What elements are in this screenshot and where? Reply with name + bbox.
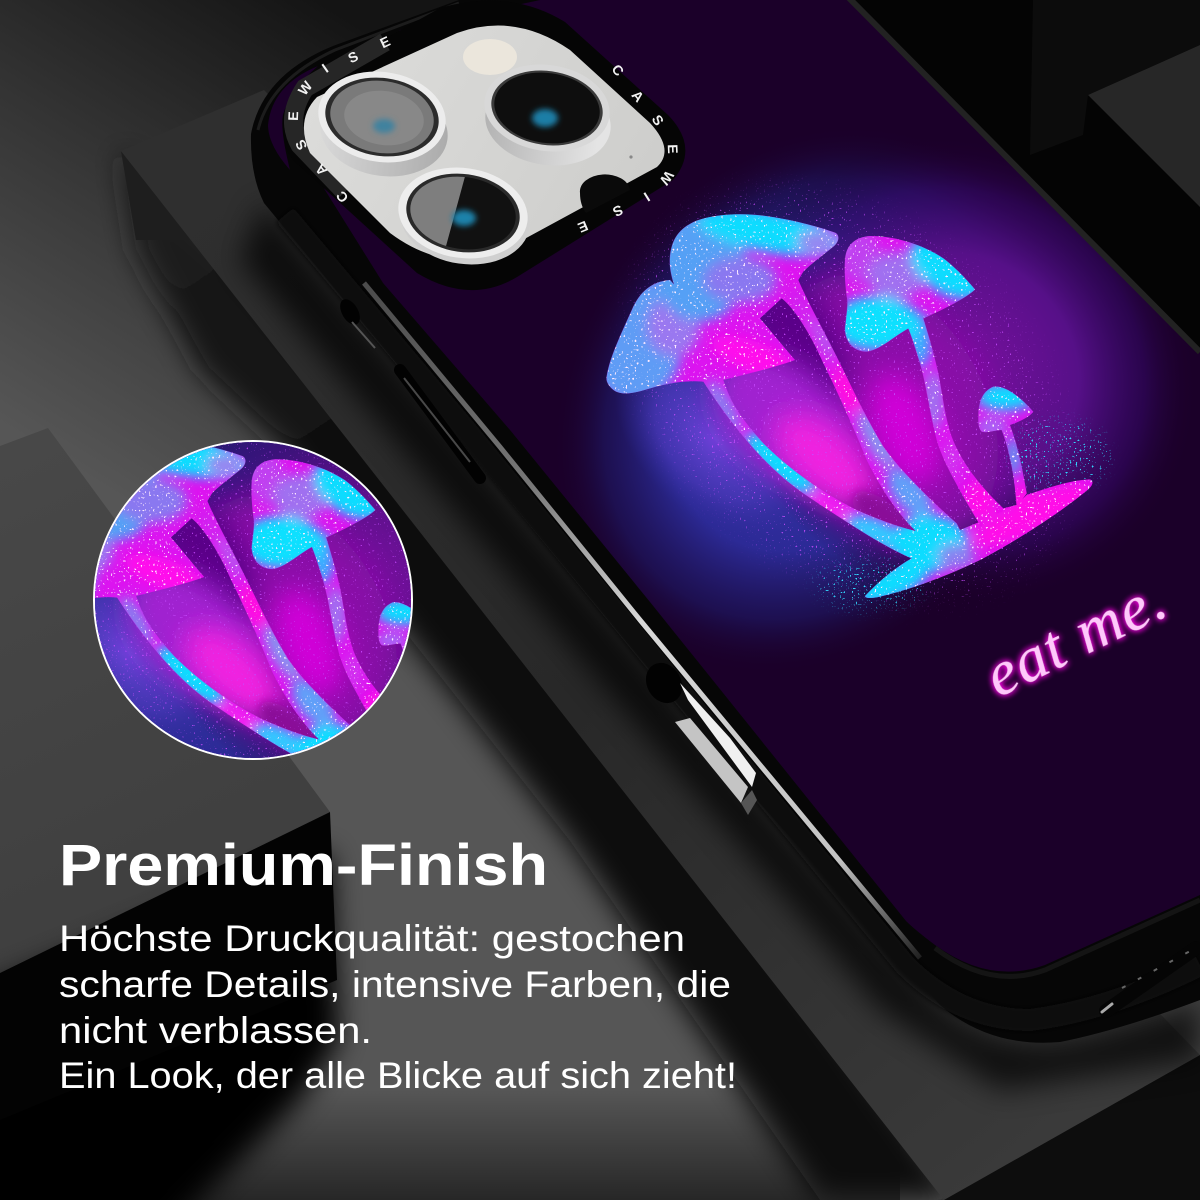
inset ring — [93, 440, 413, 760]
case body — [251, 0, 1200, 1043]
CASEWISE ring text, left: C — [333, 188, 351, 206]
CASEWISE ring text, left: E — [377, 33, 393, 51]
text band — [294, 42, 385, 192]
CASEWISE ring text, left: S — [345, 48, 361, 66]
spray speckles — [540, 130, 1160, 650]
charging port — [1102, 948, 1196, 1012]
case side bevel — [285, 215, 1200, 1020]
case top lip — [258, 3, 459, 130]
body copy: Höchste Druckqualität: gestochen — [59, 917, 685, 959]
neon text: eat me.: eat me. — [973, 563, 1177, 711]
phone case — [251, 0, 1200, 1043]
body copy: scharfe Details, intensive Farben, die — [59, 963, 731, 1005]
flash — [463, 39, 517, 75]
side button: action silver — [639, 656, 757, 815]
CASEWISE ring text, right: E — [665, 144, 681, 154]
zoom inset circle — [93, 440, 413, 760]
camera plate — [304, 26, 665, 259]
lens: upper left — [312, 64, 454, 184]
microphone hole — [580, 174, 630, 213]
bump outer ring — [278, 1, 685, 290]
glow behind mushrooms — [447, 25, 1200, 775]
glossy edge highlight — [364, 0, 1200, 976]
lens: bottom — [398, 168, 528, 264]
body copy — [59, 917, 737, 1096]
CASEWISE ring text, right — [576, 61, 681, 236]
CASEWISE ring text, right: A — [629, 87, 647, 105]
CASEWISE ring text, left: W — [295, 77, 316, 98]
CASEWISE ring text, left: I — [319, 60, 331, 76]
CASEWISE ring text, right: S — [649, 112, 667, 128]
camera bump — [268, 1, 685, 290]
mushroom group — [583, 199, 1110, 620]
lens: upper right — [479, 57, 616, 173]
CASEWISE ring text, left — [285, 33, 393, 206]
CASEWISE ring text, left: A — [312, 161, 330, 179]
lenses — [312, 39, 633, 273]
phone shadow — [240, 203, 1200, 1090]
purple crescent — [268, 66, 318, 170]
mushroom artwork — [447, 25, 1200, 775]
body copy: Ein Look, der alle Blicke auf sich zieht! — [59, 1054, 737, 1096]
inset magnified artwork — [95, 442, 411, 758]
body copy: nicht verblassen. — [59, 1009, 372, 1051]
CASEWISE ring text, right: S — [610, 202, 626, 220]
CASEWISE ring text, left: E — [285, 111, 301, 121]
CASEWISE ring text, right: I — [641, 189, 653, 205]
sensor dot — [629, 155, 633, 159]
artwork clipped to back panel — [576, 151, 1172, 700]
side button: volume — [400, 370, 480, 478]
CASEWISE ring text, right: W — [656, 168, 677, 189]
CASEWISE ring text, right: E — [576, 218, 590, 236]
CASEWISE ring text, left: S — [292, 137, 310, 153]
CASEWISE ring text, right: C — [609, 61, 627, 79]
back panel purple — [300, 0, 1200, 972]
title: Premium-Finish — [59, 833, 548, 898]
side button: mute switch — [336, 296, 375, 348]
